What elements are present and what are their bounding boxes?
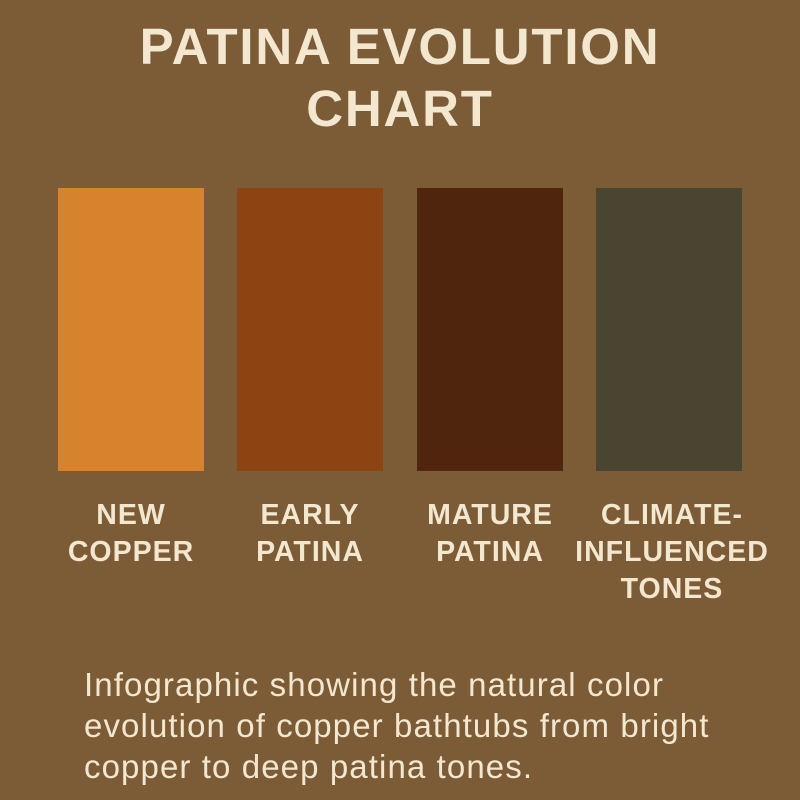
swatch: climate-influenced tones (596, 188, 742, 471)
label: new copper: NEW (96, 499, 166, 531)
label: climate-influenced tones (575, 499, 769, 605)
caption: evolution of copper bathtubs from bright (84, 707, 710, 744)
caption: Infographic showing the natural color (84, 666, 664, 703)
label: climate-influenced tones: TONES (621, 573, 723, 605)
title: CHART (306, 80, 494, 137)
label: early patina: EARLY (260, 499, 359, 531)
label: climate-influenced tones: CLIMATE- (601, 499, 743, 531)
label: early patina (256, 499, 364, 568)
swatch: early patina (237, 188, 383, 471)
label: early patina: PATINA (256, 536, 364, 568)
label: mature patina: MATURE (427, 499, 553, 531)
title: PATINA EVOLUTION (140, 18, 660, 75)
label: mature patina: PATINA (436, 536, 544, 568)
title (140, 18, 660, 137)
label: mature patina (427, 499, 553, 568)
caption: copper to deep patina tones. (84, 748, 533, 785)
label: new copper: COPPER (68, 536, 194, 568)
caption (84, 666, 710, 785)
swatch: new copper (58, 188, 204, 471)
label: climate-influenced tones: INFLUENCED (575, 536, 769, 568)
swatch: mature patina (417, 188, 563, 471)
label: new copper (68, 499, 194, 568)
